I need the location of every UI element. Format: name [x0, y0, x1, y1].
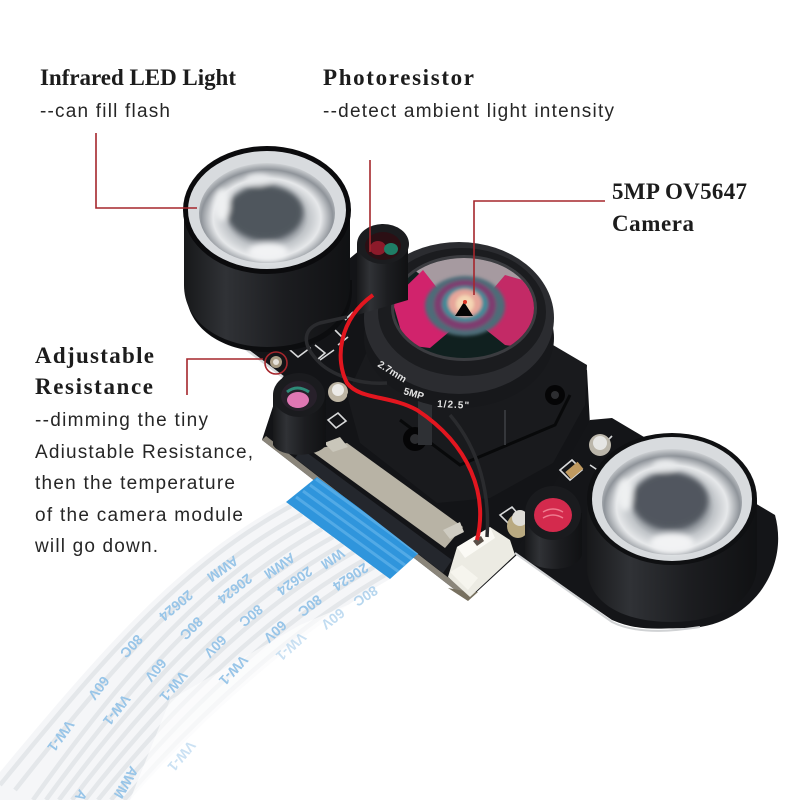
right photoresistor: [525, 486, 582, 569]
label: camera: [612, 179, 747, 236]
label: adjustable resistance: will go down.: [34, 536, 158, 557]
ribbon printing: VW-1: [164, 738, 199, 775]
leader: camera: [474, 201, 605, 295]
ribbon printing: 20624: [156, 587, 196, 625]
label: adjustable resistance: Resistance: [35, 374, 153, 399]
ribbon printing: 60V: [318, 605, 348, 633]
ribbon printing: 80C: [295, 592, 325, 620]
label: photoresistor: Photoresistor: [323, 65, 474, 90]
label: infrared LED light: Infrared LED Light: [40, 65, 236, 90]
ribbon printing: 60V: [201, 632, 230, 661]
ribbon printing: WM: [318, 545, 348, 573]
ribbon printing: 80C: [236, 601, 266, 630]
label: photoresistor: [323, 65, 614, 122]
label: adjustable resistance: of the camera module: [35, 505, 243, 526]
leader: adjustable resistance: [187, 359, 263, 395]
label: adjustable resistance: then the temperature: [35, 473, 235, 494]
label: adjustable resistance: Adiustable Resistance,: [35, 442, 253, 463]
ribbon printing: 60V: [141, 656, 170, 685]
lens marking: 5MP: [402, 386, 425, 403]
ribbon printing: AWM: [204, 553, 241, 585]
black wire: [306, 317, 488, 537]
label: infrared LED light: [40, 65, 236, 122]
middle sensor: [273, 373, 326, 455]
label: camera: Camera: [612, 211, 694, 236]
left infrared LED: [183, 146, 352, 352]
ribbon printing: VW-1: [273, 629, 310, 664]
ribbon cable: [0, 502, 395, 800]
ribbon printing: VW-1: [216, 652, 251, 689]
marker circle: [265, 352, 287, 374]
label: adjustable resistance: Adjustable: [35, 343, 154, 368]
label: camera: 5MP OV5647: [612, 179, 747, 204]
FPC connector: [295, 437, 464, 573]
ribbon printing: VW-1: [44, 717, 78, 755]
lens marking: [375, 359, 470, 412]
label: adjustable resistance: [34, 343, 253, 557]
ribbon printing: VW-1: [156, 668, 191, 705]
lens marking: 2.7mm: [375, 359, 408, 385]
label: photoresistor: --detect ambient light intensity: [323, 101, 614, 122]
ribbon printing: AWM: [261, 550, 298, 582]
ribbon printing: 80C: [351, 582, 381, 610]
ribbon printing: 20624: [274, 563, 315, 599]
camera board: [186, 250, 778, 631]
leader: photoresistor: [369, 160, 371, 252]
screws: [270, 356, 282, 368]
lens marking: 1/2.5": [437, 399, 470, 412]
blue stiffener: [286, 477, 420, 579]
ribbon printing: 80C: [177, 614, 206, 643]
callout lines: [96, 133, 605, 395]
ribbon printing: 60V: [260, 617, 290, 646]
ribbon printing: [44, 545, 381, 800]
lens holder block: [347, 345, 587, 503]
board components: [290, 312, 612, 523]
top photoresistor: [357, 224, 409, 315]
red wire: [341, 295, 480, 540]
ribbon printing: 60V: [85, 673, 113, 703]
right wing: [515, 418, 778, 629]
label: infrared LED light: --can fill flash: [40, 101, 170, 122]
fisheye lens: [364, 242, 554, 412]
leader: infrared LED: [96, 133, 197, 208]
wire connector: [448, 527, 515, 597]
right infrared LED: [587, 433, 757, 622]
left wing and main board: [186, 250, 590, 600]
ribbon printing: 80C: [117, 632, 146, 661]
ribbon printing: 20624: [215, 571, 255, 607]
label: adjustable resistance: --dimming the tiny: [35, 410, 208, 431]
ribbon printing: 20624: [330, 560, 371, 595]
ribbon printing: VW-1: [100, 691, 134, 729]
